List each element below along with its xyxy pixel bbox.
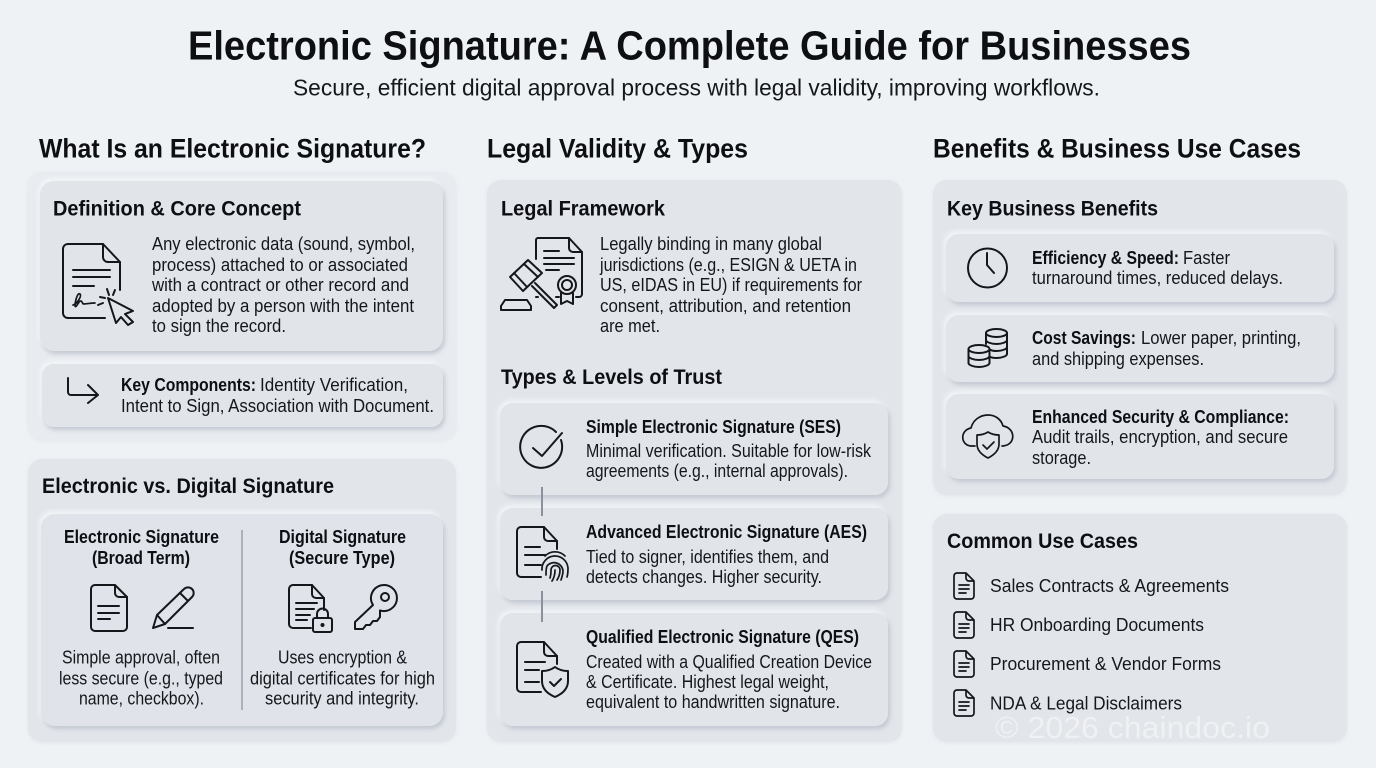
heading: key business benefits: Key Business Benefits [947, 196, 1158, 220]
card: qualified electronic signature: Qualified Electronic Signature (QES) [586, 627, 859, 647]
text: legal framework body: consent, attribution, and retention [600, 296, 851, 316]
connector: AES to QES [541, 591, 543, 622]
list item: sales contracts: Sales Contracts & Agreements [990, 576, 1229, 596]
card: efficiency and speed: turnaround times, reduced delays. [1032, 268, 1283, 288]
text: legal framework body: US, eIDAS in EU) if requirements for [600, 275, 862, 295]
card: enhanced security and compliance [946, 394, 1334, 479]
panel: definition group [28, 172, 456, 440]
panel: electronic vs digital signature [28, 459, 456, 742]
card: advanced electronic signature: Advanced Electronic Signature (AES) [586, 522, 867, 542]
card: cost savings: Cost Savings: [1032, 328, 1136, 348]
card: enhanced security and compliance: Enhanced Security & Compliance: [1032, 407, 1289, 427]
card: qualified electronic signature: & Certificate. Highest legal weight, [586, 672, 829, 692]
title: Electronic Signature: A Complete Guide for Businesses [188, 22, 1191, 68]
heading: types and levels of trust: Types & Levels of Trust [501, 365, 722, 389]
icon: check circle [520, 426, 562, 468]
column: electronic signature [59, 527, 223, 708]
card: qualified electronic signature: equivalent to handwritten signature. [586, 692, 840, 712]
text: definition body: to sign the record. [152, 316, 286, 336]
card: comparison [41, 514, 443, 726]
text: legal framework body: Legally binding in many global [600, 234, 822, 254]
text: key components: Key Components: [121, 375, 256, 395]
list item: nda [954, 690, 1182, 716]
card: advanced electronic signature: detects changes. Higher security. [586, 567, 822, 587]
card: cost savings: Lower paper, printing, [1141, 328, 1301, 348]
heading: electronic vs digital: Electronic vs. Digital Signature [42, 474, 334, 498]
icon: cloud with shield [963, 415, 1013, 458]
column heading: what is an electronic signature: What Is an Electronic Signature? [39, 134, 426, 164]
text: definition body: process) attached to or associated [152, 255, 408, 275]
list item: hr onboarding [954, 612, 1204, 638]
icon: clock [968, 248, 1007, 288]
list item: hr onboarding: HR Onboarding Documents [990, 615, 1204, 635]
connector: SES to AES [541, 487, 543, 516]
card: qualified electronic signature: Created with a Qualified Creation Device [586, 652, 872, 672]
card: definition and core concept [40, 181, 443, 351]
icon: document with lock [289, 585, 332, 632]
list item: procurement [954, 651, 1221, 677]
icon: signed document with cursor [63, 244, 133, 325]
card: advanced electronic signature: Tied to signer, identifies them, and [586, 547, 829, 567]
divider [241, 530, 243, 710]
column heading: legal validity and types: Legal Validity & Types [487, 134, 748, 164]
text: definition body: adopted by a person with the intent [152, 296, 414, 316]
card: key components [42, 364, 443, 427]
text: legal framework body: are met. [600, 316, 660, 336]
column: digital signature: Digital Signature [279, 527, 406, 547]
heading: definition: Definition & Core Concept [53, 196, 301, 220]
icon: document with shield [517, 642, 568, 697]
card: simple electronic signature: agreements (e.g., internal approvals). [586, 461, 848, 481]
card: efficiency and speed: Efficiency & Speed: [1032, 248, 1179, 268]
column: electronic signature: Electronic Signature [64, 527, 219, 547]
card: efficiency and speed: Faster [1183, 248, 1230, 268]
column: electronic signature: (Broad Term) [92, 548, 190, 568]
text: definition body [151, 234, 415, 336]
icon: key [355, 585, 397, 629]
text: key components: Intent to Sign, Association with Document. [121, 396, 434, 416]
icon: document [91, 585, 127, 631]
column: digital signature: (Secure Type) [289, 548, 395, 568]
panel: key business benefits [933, 180, 1347, 495]
card: cost savings [946, 315, 1334, 382]
watermark: © 2026 chaindoc.io [995, 710, 1270, 745]
card: enhanced security and compliance: Audit trails, encryption, and secure [1032, 427, 1288, 447]
card: advanced electronic signature [500, 508, 888, 600]
icon: gavel and certificate [501, 238, 582, 310]
icon: pen [153, 587, 194, 628]
card: enhanced security and compliance: storage. [1032, 448, 1091, 468]
card: qualified electronic signature [500, 613, 888, 726]
subtitle: Secure, efficient digital approval process with legal validity, improving workflows. [293, 74, 1100, 100]
column: digital signature: Uses encryption & [278, 648, 407, 668]
text: legal framework body [599, 234, 862, 336]
text: definition body: with a contract or other record and [151, 275, 409, 295]
heading: common use cases: Common Use Cases [947, 529, 1138, 553]
column: digital signature: digital certificates for high [250, 668, 435, 688]
column heading: benefits and use cases: Benefits & Business Use Cases [933, 134, 1301, 164]
card: cost savings: and shipping expenses. [1032, 349, 1204, 369]
icon: coin stacks [968, 329, 1007, 367]
text: key components [121, 375, 434, 416]
card: simple electronic signature [500, 403, 888, 495]
heading: legal framework: Legal Framework [501, 196, 665, 220]
text: legal framework body: jurisdictions (e.g., ESIGN & UETA in [599, 255, 857, 275]
card: efficiency and speed [946, 234, 1334, 302]
icon: document with fingerprint [517, 527, 568, 581]
card: simple electronic signature: Minimal verification. Suitable for low-risk [586, 441, 872, 461]
list item: sales contracts [954, 573, 1229, 599]
icon: turn arrow [68, 378, 98, 403]
text: key components: Identity Verification, [260, 375, 408, 395]
list item: procurement: Procurement & Vendor Forms [990, 654, 1221, 674]
card: simple electronic signature: Simple Electronic Signature (SES) [586, 417, 841, 437]
column: electronic signature: Simple approval, often [62, 648, 220, 668]
panel: legal validity and types [487, 180, 902, 742]
list item: nda: NDA & Legal Disclaimers [990, 694, 1182, 714]
panel: common use cases [933, 514, 1347, 742]
column: electronic signature: name, checkbox). [79, 688, 204, 708]
column: electronic signature: less secure (e.g., typed [59, 668, 223, 688]
column: digital signature [250, 527, 435, 708]
column: digital signature: security and integrity. [265, 688, 419, 708]
text: definition body: Any electronic data (sound, symbol, [152, 234, 415, 254]
